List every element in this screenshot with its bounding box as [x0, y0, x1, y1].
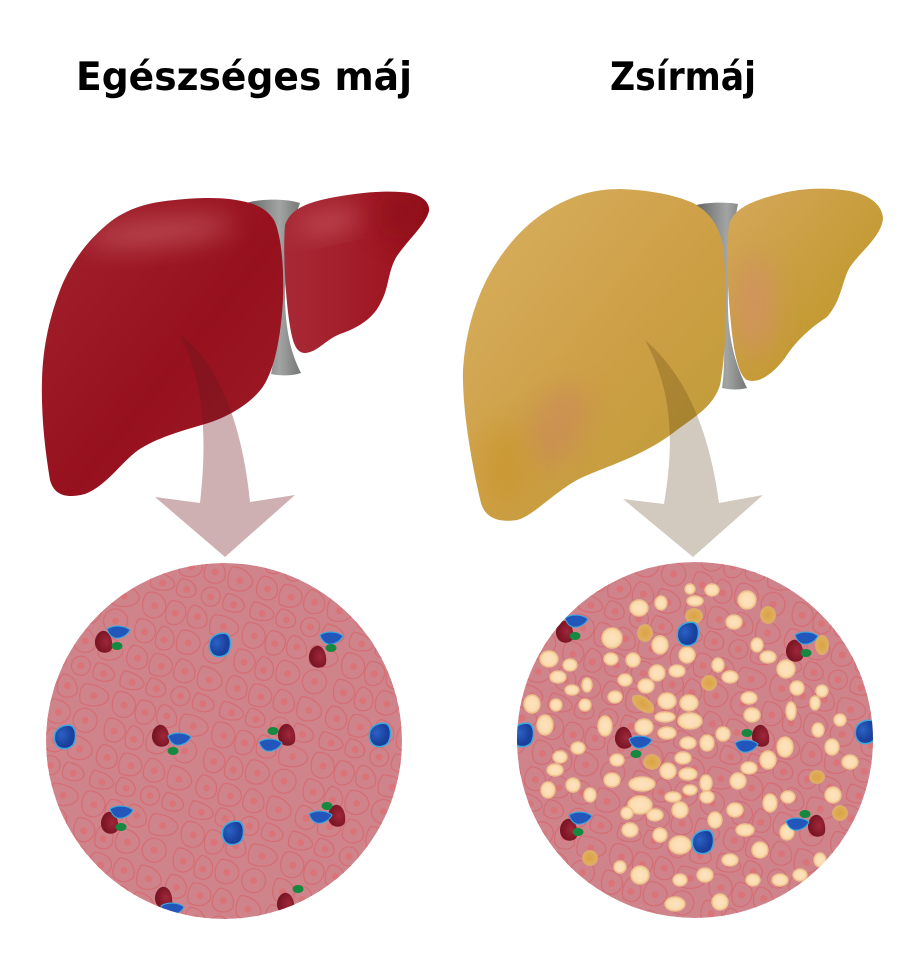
arrow tip seen through the liver: [645, 340, 697, 436]
ligament: fatty liver: [696, 203, 747, 390]
left lobe: fatty liver: [455, 180, 735, 525]
portal triads: healthy tissue: [95, 626, 345, 915]
title: fatty liver: Zsírmáj: [610, 55, 756, 100]
arrow tip seen through the liver: [180, 336, 232, 424]
illustration: healthy liver: [35, 185, 435, 557]
lipid-laden cells: fatty tissue: [582, 606, 848, 866]
panel: fatty tissue circle: [512, 562, 876, 918]
portal triads: fatty tissue: [556, 615, 825, 841]
veins: fatty tissue: [512, 622, 876, 854]
left lobe: healthy liver: [42, 198, 284, 496]
veins: healthy tissue: [54, 633, 391, 845]
title: healthy liver: Egészséges máj: [76, 55, 412, 100]
fat droplets: fatty tissue: [524, 584, 858, 911]
right lobe: healthy liver: [284, 192, 430, 353]
illustration: fatty liver: [455, 180, 890, 557]
panel: healthy tissue circle: [46, 563, 402, 919]
arrow: healthy liver to tissue: [155, 335, 295, 557]
right lobe: fatty liver: [727, 188, 883, 381]
ligament: healthy liver: [247, 200, 301, 375]
arrow: fatty liver to tissue: [623, 340, 763, 557]
